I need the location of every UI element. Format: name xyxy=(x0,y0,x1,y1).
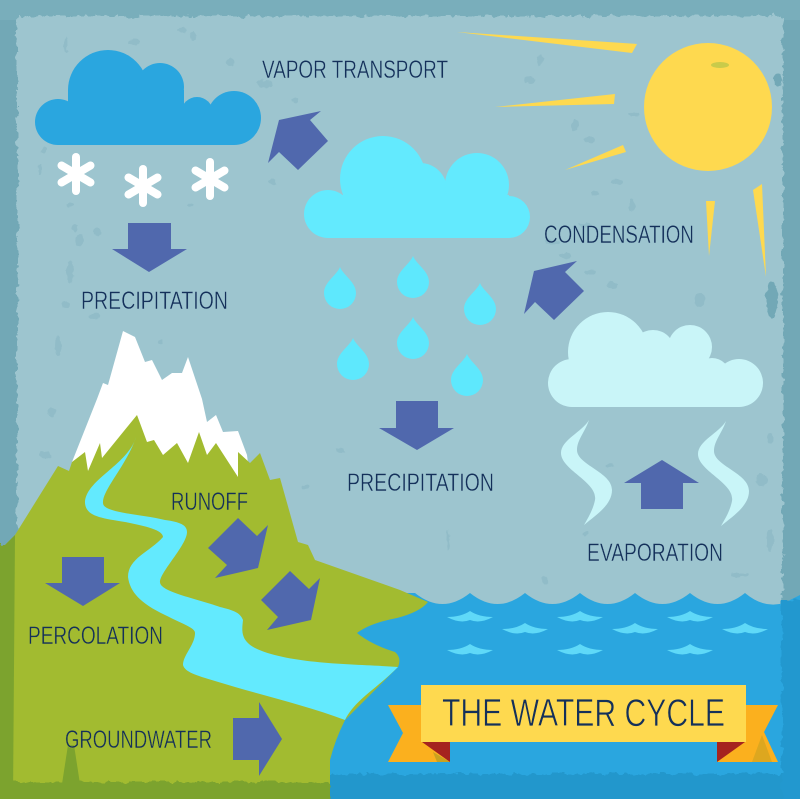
rain drops xyxy=(324,256,496,396)
ribbon tails xyxy=(388,705,778,762)
ribbon tail stains xyxy=(433,735,772,762)
grunge texture on sky xyxy=(38,28,774,584)
arrow: runoff upper xyxy=(208,518,268,578)
arrow: vapor transport xyxy=(268,111,328,170)
right edge wear xyxy=(766,73,782,318)
mountain snow cap xyxy=(72,331,250,480)
steam wisps xyxy=(561,420,749,526)
label: vapor transport: VAPOR TRANSPORT xyxy=(262,56,448,84)
sun stain xyxy=(711,62,729,68)
cloud: dark blue snow cloud xyxy=(35,50,261,145)
arrow: runoff lower xyxy=(261,571,320,630)
arrow: percolation down xyxy=(45,557,120,606)
ribbon folds xyxy=(422,742,745,762)
label: runoff: RUNOFF xyxy=(171,488,248,516)
arrow: condensation xyxy=(524,261,584,320)
arrow: groundwater right xyxy=(233,702,282,776)
sea xyxy=(320,593,800,799)
arrow: rain precipitation down xyxy=(379,401,454,450)
small waves xyxy=(447,611,768,654)
label: condensation: CONDENSATION xyxy=(544,221,694,249)
sun rays xyxy=(457,32,766,277)
snowflakes xyxy=(62,157,224,203)
label: precipitation left: PRECIPITATION xyxy=(81,287,228,315)
cloud: cyan rain cloud xyxy=(304,136,530,238)
arrow: evaporation up xyxy=(624,460,699,509)
river xyxy=(85,437,398,720)
label: percolation: PERCOLATION xyxy=(28,622,163,650)
sun xyxy=(457,32,772,277)
label: groundwater: GROUNDWATER xyxy=(65,726,212,754)
arrow: snow precipitation down xyxy=(112,223,187,272)
ribbon panel xyxy=(421,685,746,742)
cloud: pale evaporation cloud xyxy=(548,312,763,407)
land: green mountain and hills xyxy=(0,415,428,799)
title banner xyxy=(388,685,778,762)
title: THE WATER CYCLE xyxy=(442,692,725,735)
label: precipitation centre: PRECIPITATION xyxy=(347,469,494,497)
label: evaporation: EVAPORATION xyxy=(587,539,723,567)
